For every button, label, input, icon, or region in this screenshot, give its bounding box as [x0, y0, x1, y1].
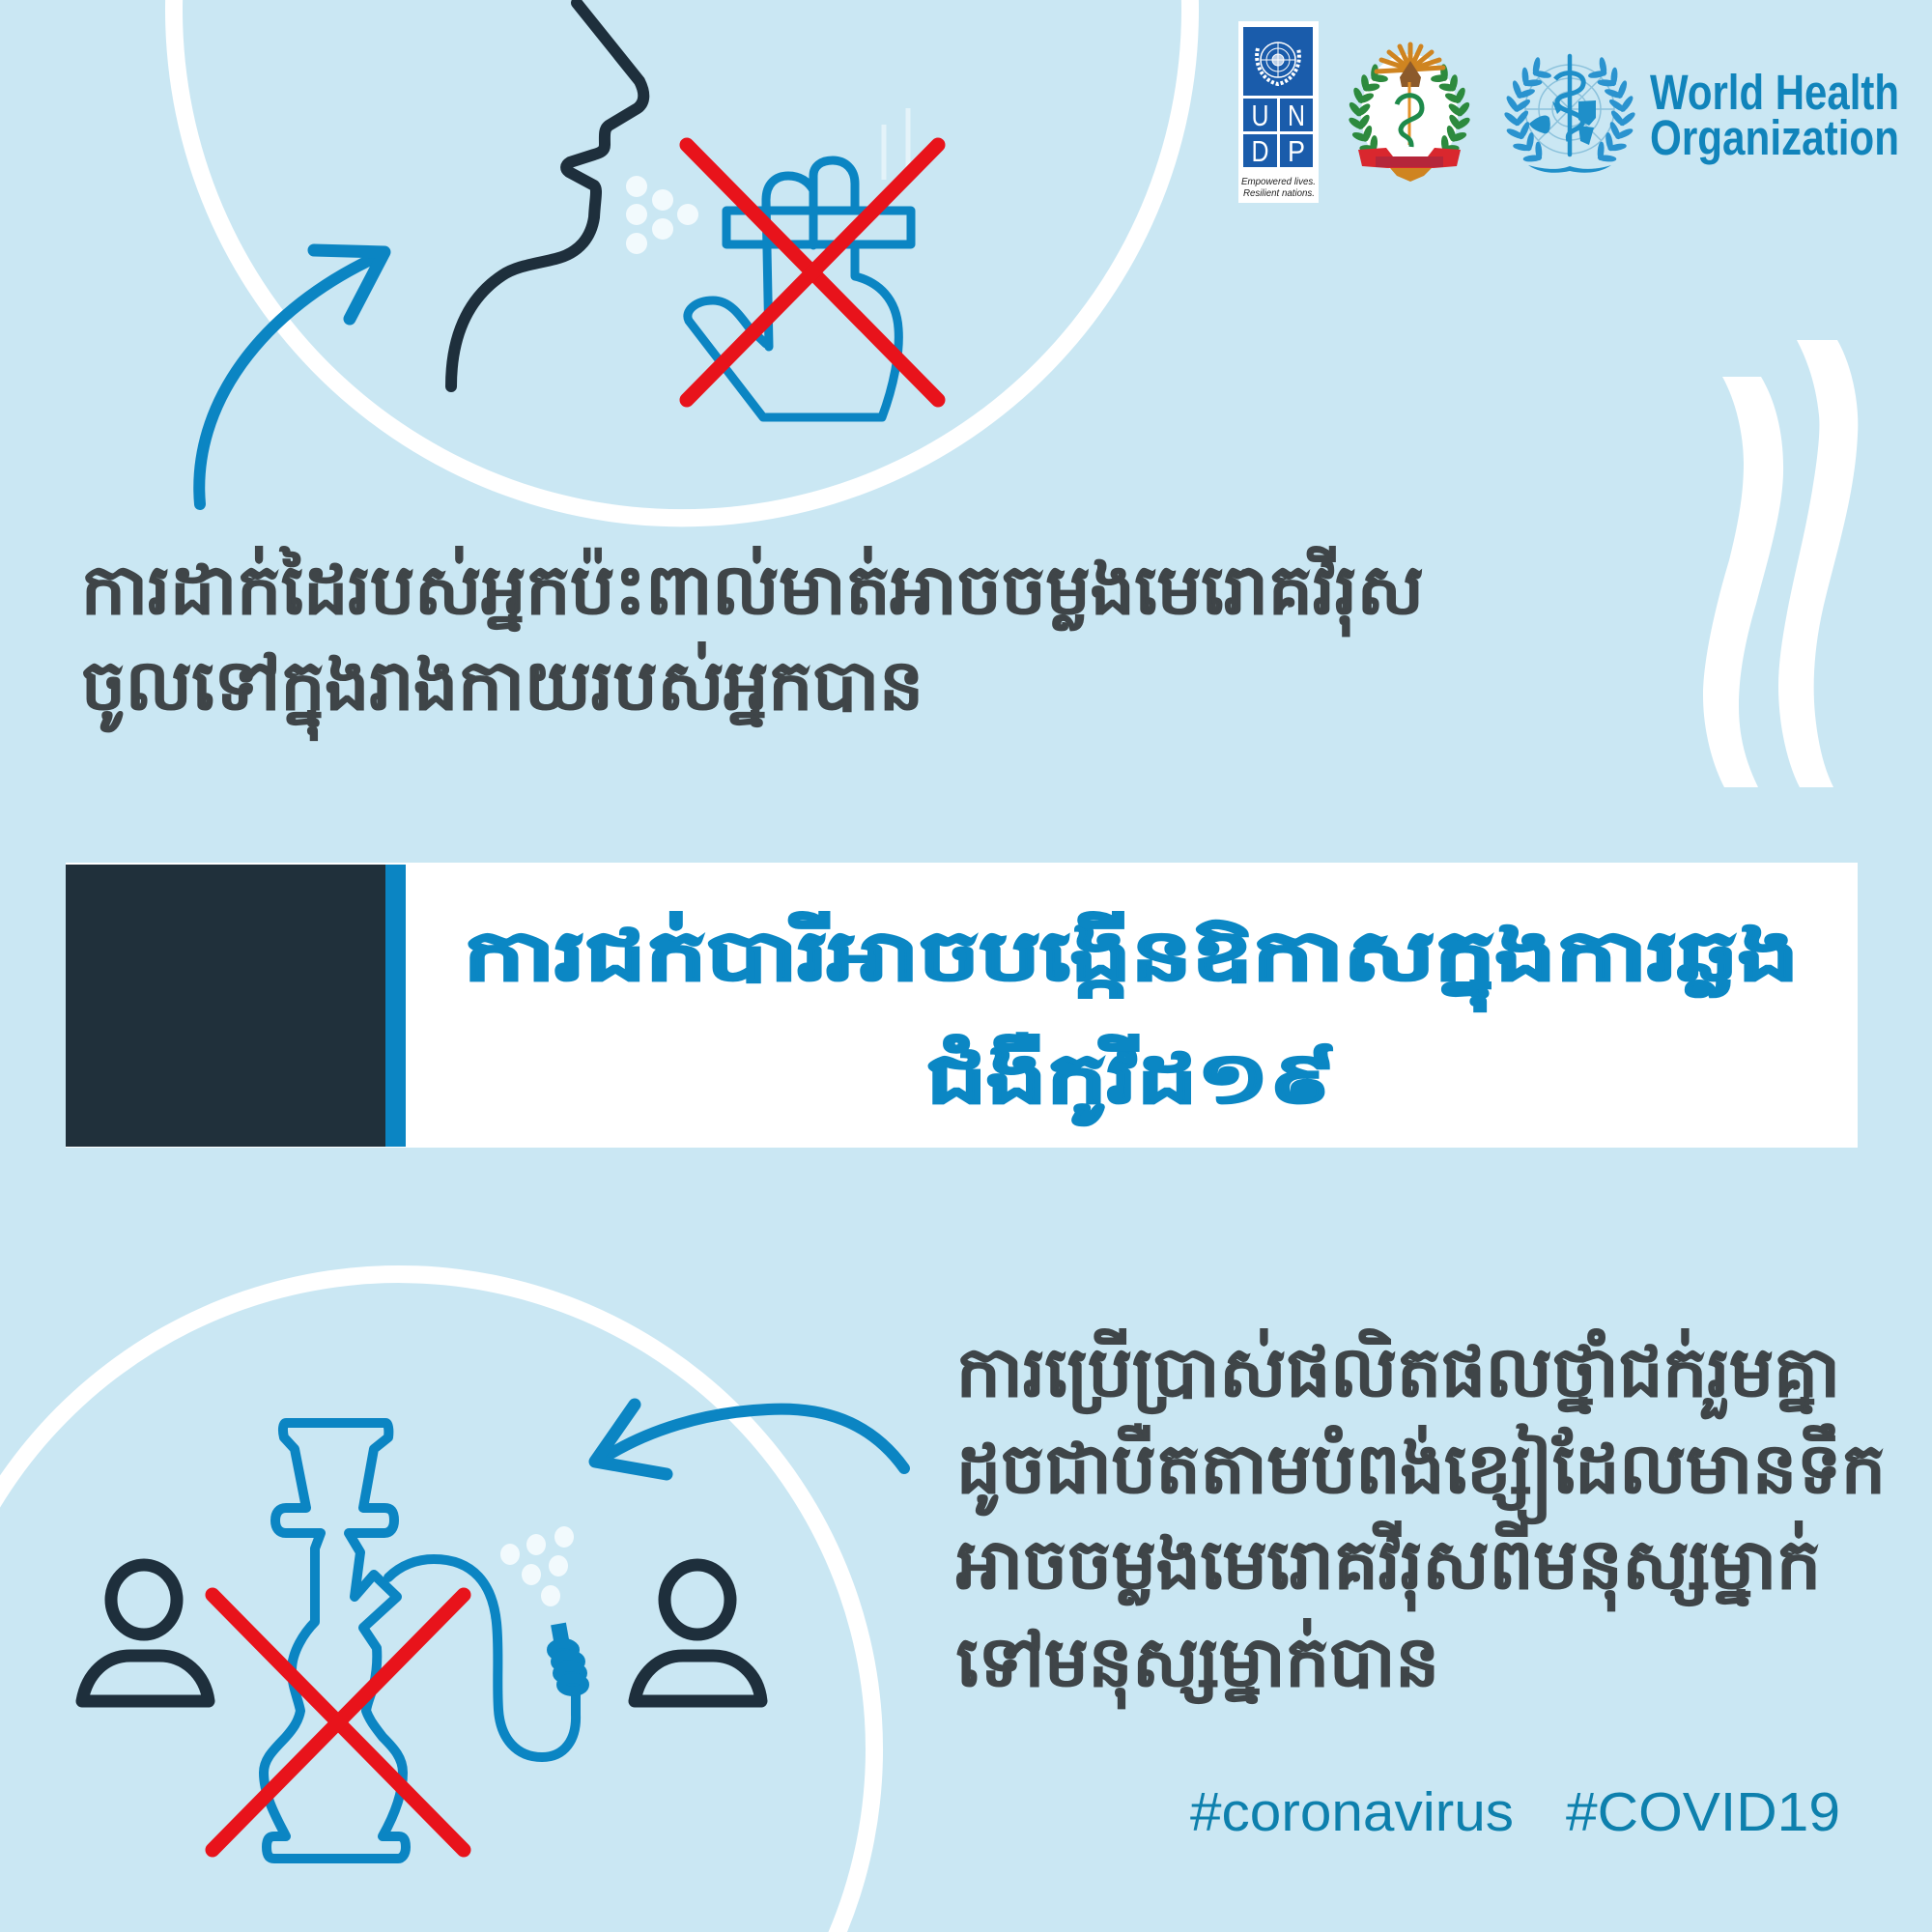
- icon: smoke droplets from hookah: [500, 1526, 574, 1606]
- white wave lines: [1703, 340, 1858, 787]
- hashtags: [1190, 1781, 1840, 1843]
- icon: hookah: [264, 1423, 584, 1859]
- top circle outline: [165, 0, 1199, 526]
- bottom circle outline: [0, 1265, 883, 1932]
- logo: UNDP: U: [1252, 99, 1269, 132]
- logo: UNDP: Resilient nations.: [1243, 187, 1315, 199]
- logo: UNDP: Empowered lives.: [1241, 176, 1316, 187]
- logo: UNDP: D: [1252, 134, 1269, 168]
- icon: red cross over hookah: [213, 1595, 464, 1850]
- hashtags: #coronavirus: [1190, 1781, 1514, 1843]
- top text block: ចូលទៅក្នុងរាងកាយរបស់អ្នកបាន: [81, 642, 923, 740]
- top text block: [81, 547, 1424, 740]
- bottom text block: ទៅមនុស្សម្នាក់បាន: [956, 1619, 1439, 1708]
- title banner: [66, 863, 1858, 1148]
- bottom text block: ការប្រើប្រាស់ផលិតផលថ្នាំជក់រួមគ្នា: [956, 1329, 1840, 1418]
- logo: UNDP: N: [1288, 99, 1305, 132]
- icon: face profile: [451, 3, 643, 386]
- logo: WHO emblem: [1504, 56, 1635, 173]
- title text: [464, 912, 1799, 1125]
- arrow: top pointing to face: [199, 250, 384, 504]
- logo: UNDP: [1238, 21, 1319, 203]
- icon: person right: [635, 1565, 761, 1701]
- top text block: ការដាក់ដៃរបស់អ្នកប៉ះពាល់មាត់អាចចម្លងមេរោគវីរុស: [81, 547, 1424, 636]
- bottom text block: [956, 1329, 1886, 1708]
- title text: ជំងឺកូវីដ១៩: [926, 1033, 1336, 1125]
- icon: red cross over hand: [687, 145, 938, 400]
- bottom text block: ដូចជាបឺតតាមបំពង់ខ្សៀដែលមានទឹក: [956, 1424, 1886, 1523]
- icon: hand holding cigarette: [688, 160, 911, 417]
- title text: ការជក់បារីអាចបង្កើនឱកាសក្នុងការឆ្លង: [464, 912, 1799, 1011]
- UN emblem: [1257, 43, 1299, 84]
- icon: cigarette smoke: [884, 108, 908, 184]
- icon: person left: [82, 1565, 209, 1701]
- icon: droplets from mouth: [626, 176, 698, 254]
- arrow: bottom pointing to hookah: [595, 1405, 904, 1474]
- hashtags: #COVID19: [1566, 1781, 1840, 1843]
- logo: Ministry of Health Cambodia: [1349, 44, 1470, 182]
- bottom text block: អាចចម្លងមេរោគវីរុសពីមនុស្សម្នាក់: [956, 1521, 1821, 1610]
- logo: UNDP: P: [1288, 134, 1305, 168]
- logo: World Health Organization wordmark: [1650, 65, 1899, 165]
